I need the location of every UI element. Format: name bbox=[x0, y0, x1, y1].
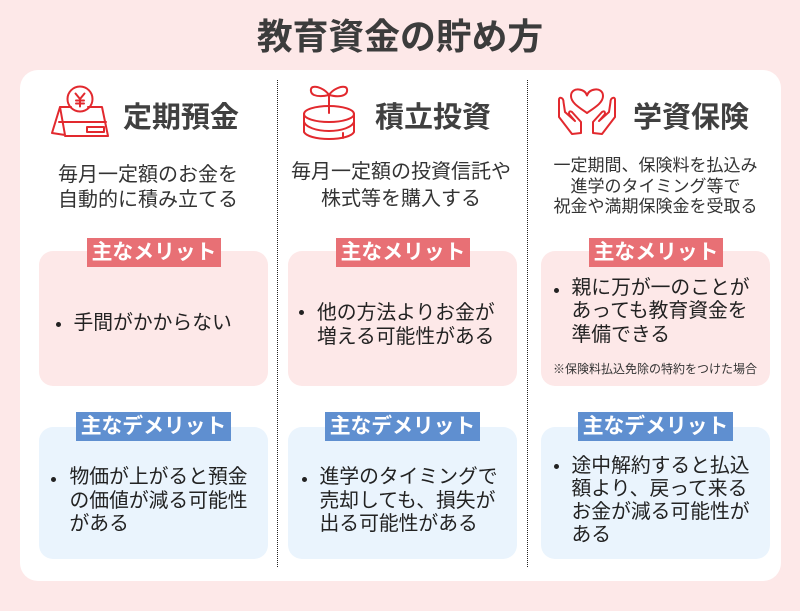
heading: 学資保険: 学資保険 bbox=[633, 102, 749, 134]
merit text: 手間がかからない bbox=[74, 312, 232, 334]
demerit text: 進学のタイミングで bbox=[320, 466, 498, 488]
panel: 定期預金 demerit bbox=[39, 427, 268, 559]
bullet bbox=[554, 288, 559, 293]
description: 積立投資: 毎月一定額の投資信託や bbox=[291, 160, 511, 182]
label: merit: 主なメリット bbox=[341, 241, 465, 264]
merit text bbox=[572, 276, 750, 346]
description: 学資保険: 祝金や満期保険金を受取る bbox=[554, 197, 758, 216]
demerit text: 出る可能性がある bbox=[320, 513, 478, 535]
demerit text bbox=[320, 466, 498, 535]
heading: 定期預金: 定期預金 bbox=[123, 102, 239, 134]
white card bbox=[20, 70, 781, 581]
icon: hands holding heart bbox=[558, 88, 616, 135]
demerit text bbox=[70, 466, 248, 535]
demerit text: ある bbox=[572, 524, 611, 546]
demerit text: 途中解約すると払込 bbox=[572, 455, 750, 477]
merit text: 親に万が一のことが bbox=[572, 276, 750, 298]
demerit text: お金が減る可能性が bbox=[572, 501, 750, 523]
label: merit: 主なメリット bbox=[92, 241, 216, 264]
note: ※保険料払込免除の特約をつけた場合 bbox=[553, 362, 757, 376]
description: 定期預金 bbox=[58, 164, 238, 210]
label: demerit: 主なデメリット bbox=[81, 415, 226, 438]
panel: 定期預金 merit bbox=[39, 251, 268, 386]
demerit text: 売却しても、損失が bbox=[320, 490, 495, 512]
description: 学資保険: 進学のタイミング等で bbox=[570, 176, 740, 196]
panel: 積立投資 demerit bbox=[288, 427, 517, 559]
merit text: 増える可能性がある bbox=[317, 326, 494, 348]
label: merit: 主なメリット bbox=[594, 241, 718, 264]
icon: sprout on coins bbox=[303, 86, 355, 140]
bullet bbox=[554, 464, 559, 469]
description: 学資保険: 一定期間、保険料を払込み bbox=[554, 156, 758, 175]
merit text: あっても教育資金を bbox=[572, 300, 748, 322]
description: 定期預金: 毎月一定額のお金を bbox=[58, 164, 238, 186]
demerit text bbox=[572, 455, 750, 546]
panel: 学資保険 merit bbox=[541, 251, 770, 386]
panel: 積立投資 merit bbox=[288, 251, 517, 386]
bullet bbox=[56, 322, 61, 327]
label: demerit: 主なデメリット bbox=[583, 415, 728, 438]
heading: 積立投資: 積立投資 bbox=[375, 102, 491, 134]
bullet bbox=[299, 310, 304, 315]
demerit text: 物価が上がると預金 bbox=[70, 466, 248, 488]
demerit text: がある bbox=[70, 513, 129, 535]
demerit text: の価値が減る可能性 bbox=[70, 490, 248, 512]
merit text bbox=[317, 302, 495, 348]
description: 学資保険 bbox=[554, 156, 758, 216]
label: demerit: 主なデメリット bbox=[330, 415, 475, 438]
title: 教育資金の貯め方 bbox=[257, 17, 543, 57]
description: 積立投資: 株式等を購入する bbox=[321, 188, 481, 210]
icon: bank passbook with yen coin bbox=[51, 86, 109, 137]
description: 積立投資 bbox=[291, 160, 511, 210]
bullet bbox=[51, 477, 56, 482]
bullet bbox=[302, 477, 307, 482]
merit text: 他の方法よりお金が bbox=[317, 302, 495, 324]
merit text: 準備できる bbox=[572, 324, 670, 346]
description: 定期預金: 自動的に積み立てる bbox=[58, 188, 238, 210]
panel: 学資保険 demerit bbox=[541, 427, 770, 559]
demerit text: 額より、戻って来る bbox=[572, 478, 747, 500]
